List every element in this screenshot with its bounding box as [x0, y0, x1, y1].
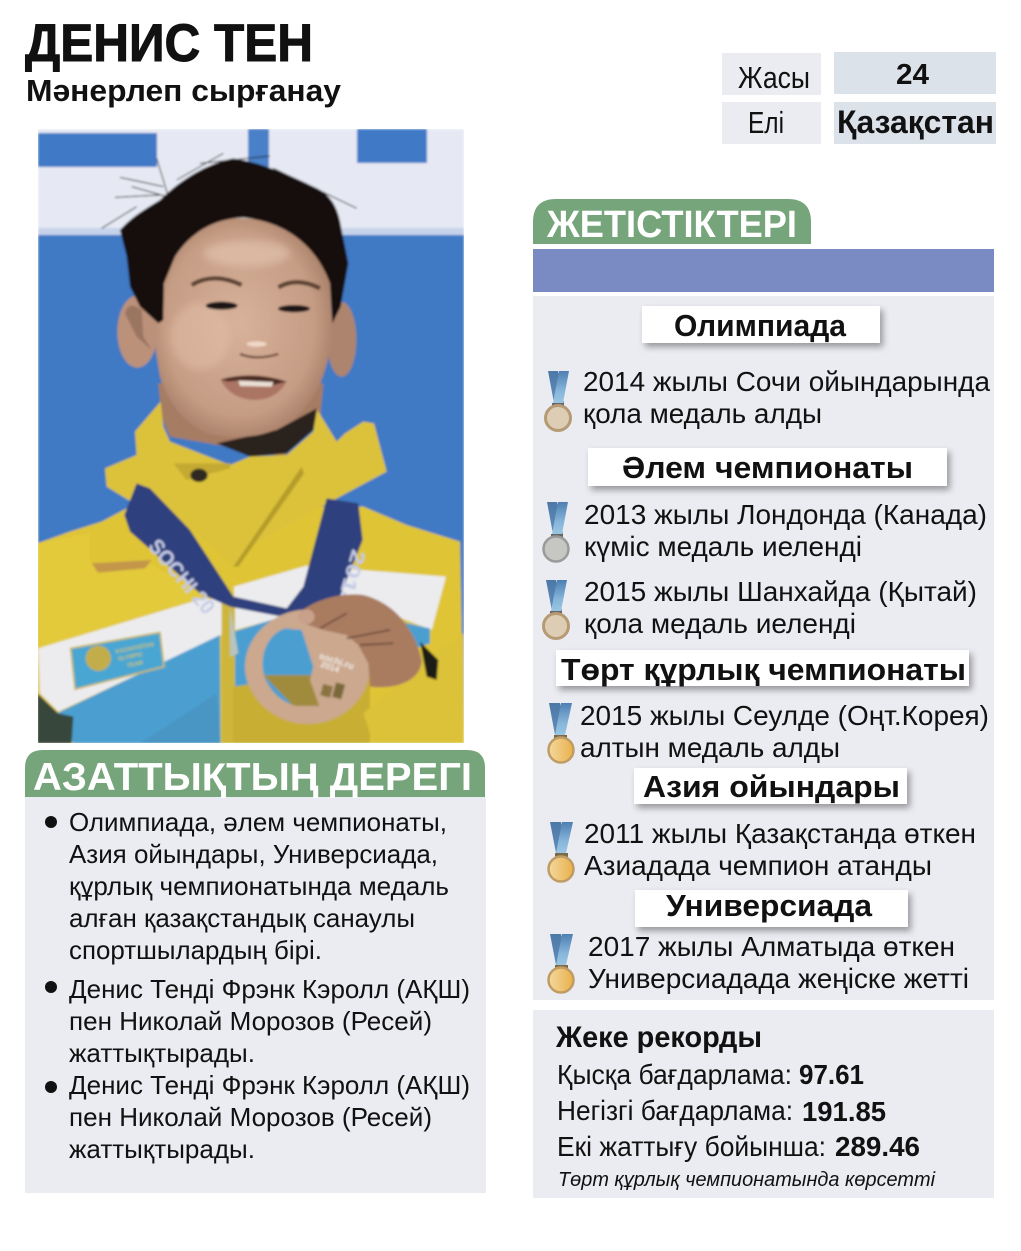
achievements heading tab: ЖЕТІСТІКТЕРІ	[546, 204, 797, 246]
medal ribbon	[124, 483, 363, 616]
portrait photo of the athlete with bronze medal: sochi.ru	[318, 651, 356, 672]
icon: gold medal	[548, 703, 574, 762]
heading: Olympics: Олимпиада	[674, 308, 847, 343]
subtitle: Мәнерлеп сырғанау	[26, 73, 342, 108]
text: 2014 Sochi: 2014 жылы Сочи ойындарында	[583, 366, 990, 397]
icon: bronze medal	[544, 580, 568, 638]
jacket body	[37, 507, 464, 743]
text: 2013 London: 2013 жылы Лондонда (Канада)	[584, 499, 987, 530]
age label	[722, 53, 821, 95]
age value	[834, 52, 996, 94]
heading: Universiade: Универсиада	[666, 888, 873, 923]
text: 2015 Shanghai: 2015 жылы Шанхайда (Қытай)	[584, 576, 977, 607]
total score: 289.46	[835, 1131, 920, 1162]
bullet text 3: пен Николай Морозов (Ресей)	[69, 1102, 432, 1132]
bullet text 1: спортшылардың бірі.	[69, 935, 322, 965]
bullet text 3	[45, 1070, 470, 1164]
text: 2017 Almaty: Универсиадада жеңіске жетті	[588, 963, 969, 994]
age label: Жасы	[738, 60, 810, 95]
bullet text 1: Олимпиада, әлем чемпионаты,	[69, 807, 447, 837]
ears	[117, 296, 157, 368]
eyes	[206, 302, 238, 310]
total score: Екі жаттығу бойынша:	[557, 1131, 826, 1162]
neck	[158, 383, 323, 457]
hair	[120, 158, 348, 323]
text: 2015 Seoul	[580, 700, 989, 763]
blue band	[533, 249, 994, 292]
text: 2017 Almaty: 2017 жылы Алматыда өткен	[588, 931, 955, 962]
text: 2017 Almaty	[588, 931, 969, 994]
country label	[722, 102, 821, 144]
bullet text 2	[45, 974, 470, 1068]
heading: Asian Games: Азия ойындары	[643, 769, 900, 804]
panel: reason for freedom / about the athlete	[25, 750, 486, 1193]
bullet text 2: Денис Тенді Фрэнк Кэролл (АҚШ)	[69, 974, 470, 1004]
bullet text 1: Азия ойындары, Универсиада,	[69, 839, 438, 869]
records heading: Жеке рекорды	[555, 1021, 762, 1054]
white and blue bands	[38, 598, 222, 712]
text: 2014 Sochi	[583, 366, 990, 429]
eyebrows	[192, 278, 320, 288]
short program score: 97.61	[799, 1059, 864, 1090]
text: 2014 Sochi: қола медаль алды	[583, 398, 822, 429]
portrait photo of the athlete with bronze medal: KAZAKHSTAN	[115, 642, 155, 655]
text: 2015 Shanghai	[584, 576, 977, 639]
age value: 24	[896, 59, 929, 91]
team patch	[71, 632, 164, 689]
info table: age and country	[722, 52, 996, 144]
short program score: Қысқа бағдарлама:	[557, 1059, 792, 1090]
portrait photo of the athlete with bronze medal: OLYMPIC	[118, 652, 144, 663]
icon: gold medal	[548, 934, 574, 992]
bullet text 1: құрлық чемпионатында медаль	[69, 871, 449, 901]
bullet text 3: жаттықтырады.	[69, 1134, 255, 1164]
text: 2013 London	[584, 499, 987, 562]
portrait photo of the athlete with bronze medal: TEAM	[127, 660, 144, 669]
country value: Қазақстан	[837, 104, 994, 140]
text: 2011 Kazakhstan	[584, 818, 976, 881]
text: 2015 Seoul: алтын медаль алды	[580, 732, 840, 763]
bullet text 2: пен Николай Морозов (Ресей)	[69, 1006, 432, 1036]
bullet text 3: Денис Тенді Фрэнк Кэролл (АҚШ)	[69, 1070, 470, 1100]
hand	[299, 594, 422, 687]
note: Төрт құрлық чемпионатында көрсетті	[558, 1169, 936, 1191]
heading: Four Continents Championship: Төрт құрлық чемпионаты	[561, 652, 966, 687]
title: ДЕНИС ТЕН	[25, 14, 313, 73]
country label: Елі	[748, 105, 784, 140]
panel: personal records	[533, 1010, 994, 1198]
text: 2015 Shanghai: қола медаль иеленді	[584, 608, 856, 639]
bullet text 1	[45, 807, 449, 965]
panel heading tab: АЗАТТЫҚТЫҢ ДЕРЕГІ	[33, 756, 472, 799]
heading: Universiade	[635, 888, 908, 927]
free program score: 191.85	[802, 1096, 886, 1127]
portrait photo of the athlete with bronze medal: SOCHI 20	[144, 534, 220, 619]
icon: silver medal	[544, 502, 568, 562]
face	[153, 218, 332, 437]
mouth	[220, 379, 286, 401]
text: 2015 Seoul: 2015 жылы Сеулде (Оңт.Корея)	[580, 700, 989, 731]
heading: World Championship: Әлем чемпионаты	[622, 450, 913, 485]
icon: bronze medal	[546, 371, 570, 430]
text: 2011 Kazakhstan: Азиадада чемпион атанды	[584, 850, 932, 881]
collar	[103, 401, 388, 508]
text: 2011 Kazakhstan: 2011 жылы Қазақстанда өткен	[584, 818, 976, 849]
bullet text 2: жаттықтырады.	[69, 1038, 255, 1068]
free program score: Негізгі бағдарлама:	[557, 1095, 793, 1126]
icon: gold medal	[548, 822, 574, 882]
text: 2013 London: күміс медаль иеленді	[584, 531, 862, 562]
portrait photo of the athlete with bronze medal: 2014	[319, 659, 341, 675]
nose	[240, 354, 278, 357]
bullet text 1: алған қазақстандық санаулы	[69, 903, 415, 933]
portrait photo of the athlete with bronze medal	[37, 129, 464, 743]
medal disc	[266, 680, 292, 706]
panel: achievements	[533, 296, 994, 1000]
portrait photo of the athlete with bronze medal: 2014	[332, 547, 369, 609]
